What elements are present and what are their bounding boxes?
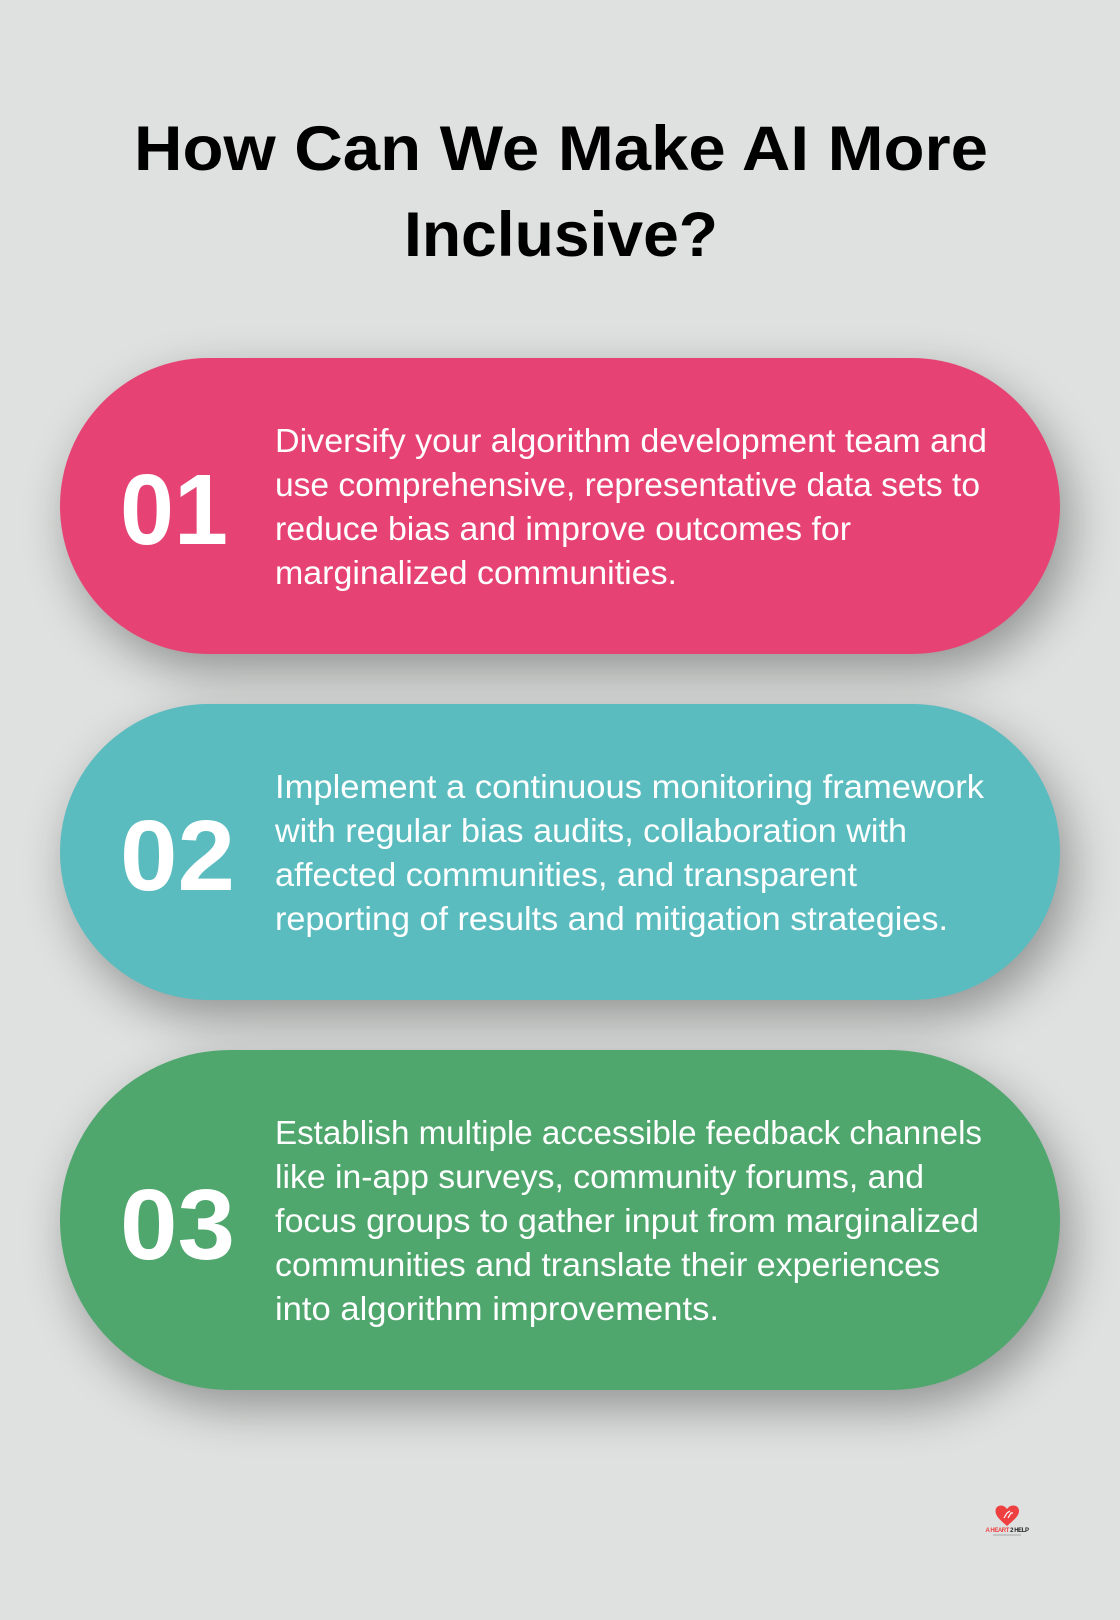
text: step 03 description: into algorithm improvements. <box>275 1290 719 1327</box>
logo wordmark: A HEART 2 HELP <box>986 1528 1029 1534</box>
title: How Can We Make AI More <box>134 114 988 184</box>
logo: A Heart 2 Help <box>986 1506 1029 1536</box>
text: step 02 description: Implement a continuous monitoring framework <box>275 768 985 805</box>
panel: step 03 <box>60 1050 1070 1408</box>
text: step 01 description: marginalized communities. <box>275 554 677 591</box>
text: step 01 description: Diversify your algorithm development team and <box>275 422 987 459</box>
text: step 03 description: like in-app surveys, community forums, and <box>275 1158 924 1195</box>
text: step 01 description <box>275 422 987 591</box>
icon: heart with hands <box>996 1506 1019 1526</box>
text: step 02 description: with regular bias audits, collaboration with <box>274 812 907 849</box>
text: step 03 description <box>275 1114 982 1327</box>
title: Inclusive? <box>404 200 718 270</box>
text: step 01 description: reduce bias and improve outcomes for <box>275 510 851 547</box>
text: step 02 description <box>274 768 985 937</box>
panel: step 02 <box>60 704 1070 1018</box>
text: step 03 description: focus groups to gather input from marginalized <box>275 1202 979 1239</box>
number 02: 02 <box>120 800 235 912</box>
text: step 03 description: Establish multiple accessible feedback channels <box>275 1114 982 1151</box>
text: step 03 description: communities and translate their experiences <box>275 1246 940 1283</box>
logo tagline <box>993 1534 1021 1536</box>
number 03: 03 <box>120 1169 235 1281</box>
panel: step 01 <box>60 358 1070 672</box>
number 01: 01 <box>120 454 228 566</box>
text: step 01 description: use comprehensive, representative data sets to <box>275 466 980 503</box>
text: step 02 description: reporting of results and mitigation strategies. <box>275 900 948 937</box>
text: step 02 description: affected communities, and transparent <box>275 856 857 893</box>
title <box>134 114 988 270</box>
